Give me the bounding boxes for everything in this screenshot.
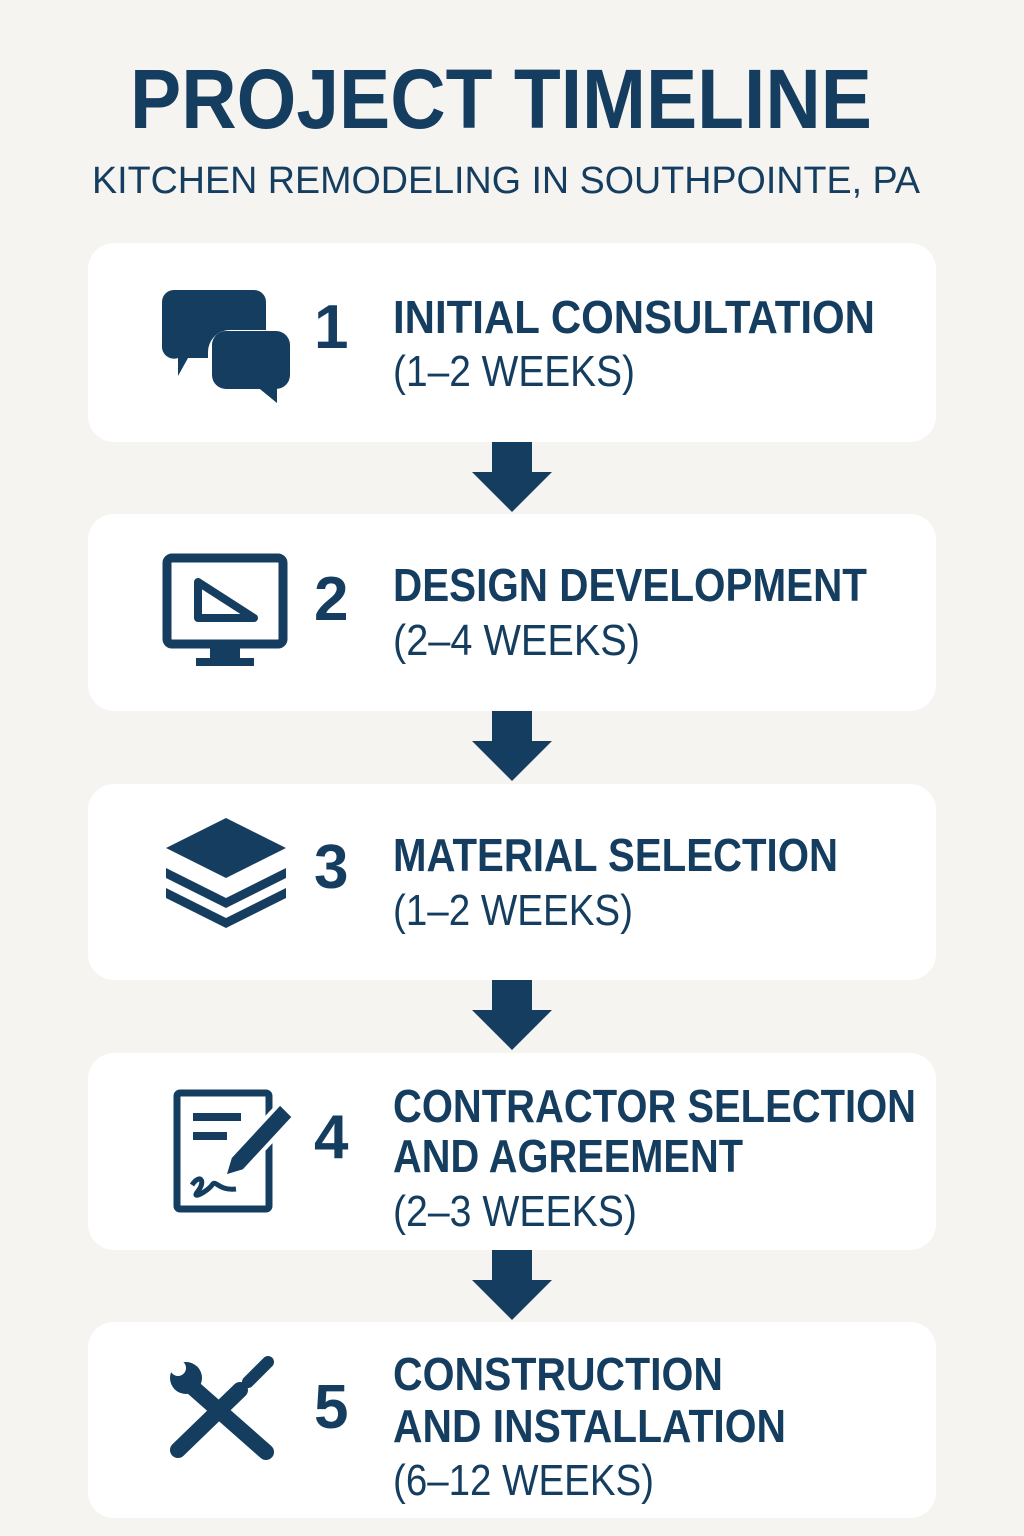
panel: step 3 [88, 784, 936, 980]
step 1 text: INITIAL CONSULTATION [393, 291, 875, 343]
subtitle: KITCHEN REMODELING IN SOUTHPOINTE, PA [92, 160, 921, 202]
number 1: 1 [314, 293, 348, 362]
panel: step 4: AND AGREEMENT [393, 1130, 743, 1182]
panel: step 1: (1–2 WEEKS) [393, 347, 635, 396]
icon: wrench and screwdriver [170, 1360, 268, 1452]
step 5 text: CONSTRUCTION [393, 1348, 723, 1400]
icon: chat bubbles [162, 290, 290, 403]
step 4 text: CONTRACTOR SELECTION [393, 1080, 916, 1132]
panel: step 1 [88, 243, 936, 442]
step 3 text: MATERIAL SELECTION [393, 829, 838, 881]
number 3: 3 [314, 833, 348, 902]
panel: step 5 [88, 1322, 936, 1518]
panel: step 2 [88, 514, 936, 711]
icon: layers [166, 818, 286, 928]
arrow 3 [472, 980, 552, 1050]
arrow 1 [472, 442, 552, 512]
number 2: 2 [314, 565, 348, 634]
panel: step 3: (1–2 WEEKS) [393, 886, 633, 935]
number 5: 5 [314, 1373, 348, 1442]
panel: step 4: (2–3 WEEKS) [393, 1187, 637, 1236]
panel: step 5: AND INSTALLATION [393, 1400, 786, 1452]
arrow 2 [472, 711, 552, 781]
number 4: 4 [314, 1103, 349, 1172]
panel: step 5: (6–12 WEEKS) [393, 1456, 654, 1505]
panel: step 4 [88, 1053, 936, 1250]
step 2 text: DESIGN DEVELOPMENT [393, 559, 867, 611]
arrow 4 [472, 1250, 552, 1320]
panel: step 2: (2–4 WEEKS) [393, 616, 640, 665]
title: PROJECT TIMELINE [130, 52, 872, 146]
icon: monitor with triangle [167, 558, 283, 666]
icon: document with pen [177, 1093, 294, 1209]
